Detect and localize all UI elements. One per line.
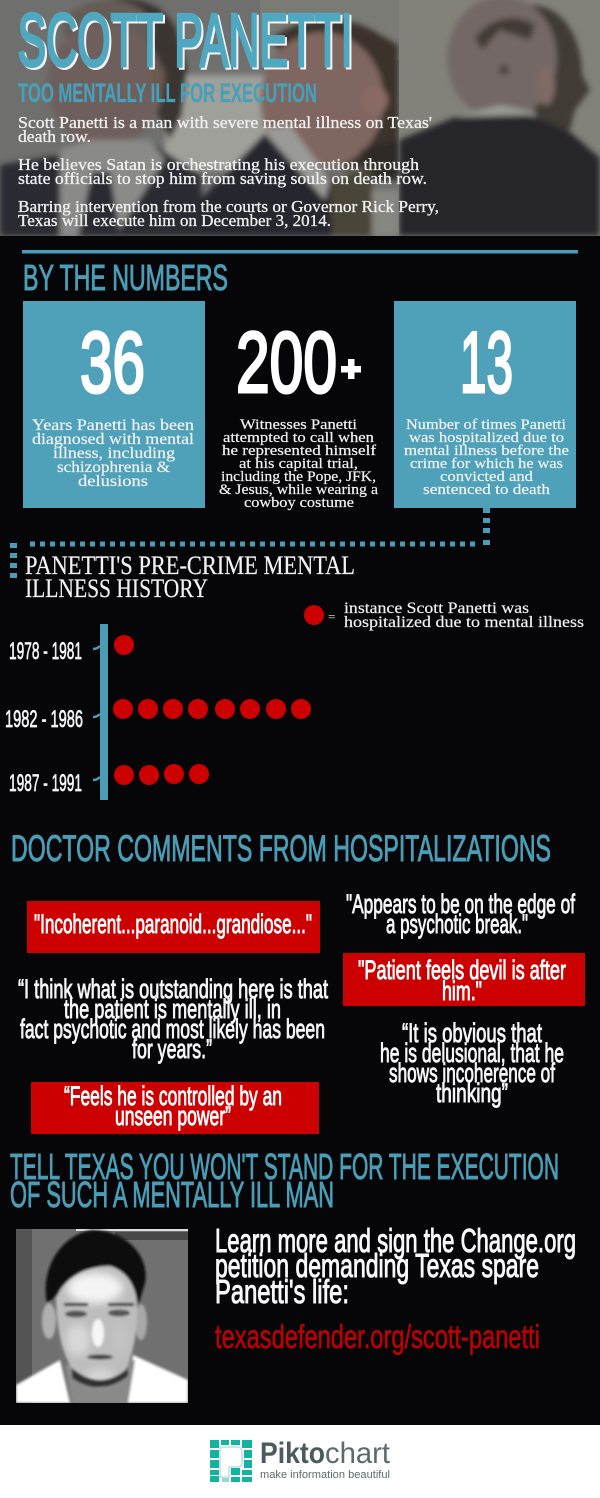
heading: mental illness history: PANETTI'S PRE-CRIME MENTAL [25, 551, 355, 580]
panel: 200+ witnesses: 200 [236, 315, 337, 411]
intro text block: Texas will execute him on December 3, 2014. [18, 211, 331, 230]
heading: tell texas [10, 1146, 559, 1215]
intro text block: death row. [18, 127, 91, 146]
panel: 36 years: diagnosed with mental [32, 431, 195, 448]
panel: 13 hospitalizations: 13 [460, 315, 513, 411]
quote box: unseen power [31, 1081, 319, 1134]
quote box: devil is after him [343, 953, 585, 1006]
panel: 200+ witnesses: cowboy costume [244, 495, 354, 511]
quote box: incoherent [27, 901, 320, 953]
chart: hospitalizations by period [5, 624, 311, 800]
intro text block [18, 113, 439, 230]
photo: Scott Panetti mugshot [16, 1229, 188, 1403]
panel: 13 hospitalizations: mental illness before the [404, 443, 569, 459]
heading: mental illness history [25, 551, 355, 603]
panel: 200+ witnesses: at his capital trial, [239, 456, 358, 472]
panel: 13 hospitalizations: Number of times Panetti [406, 417, 566, 433]
title: Scott Panetti [18, 0, 354, 84]
chart: hospitalizations by period: 1987 - 1991 [9, 770, 82, 797]
call to action text [215, 1222, 576, 1310]
hero photo: mugshot background [0, 0, 600, 236]
heading: by the numbers: BY THE NUMBERS [23, 257, 228, 298]
quote: mentally ill: for years.” [132, 1034, 212, 1064]
logo wordmark: chart [325, 1437, 391, 1470]
quote box: incoherent: "Incoherent...paranoid...grandiose..." [34, 909, 312, 939]
panel: 13 hospitalizations: convicted and [440, 469, 534, 485]
panel: 200+ witnesses [219, 315, 378, 511]
legend: instance Scott Panetti was [344, 600, 529, 617]
panel: 200+ witnesses: & Jesus, while wearing a [219, 482, 378, 498]
panel: 13 hospitalizations [394, 301, 576, 508]
heading: mental illness history: ILLNESS HISTORY [25, 574, 208, 603]
panel: 36 years: illness, including [53, 445, 175, 462]
panel: 36 years: delusions [78, 473, 148, 490]
footer band [0, 1425, 600, 1498]
chart: hospitalizations by period: 1978 - 1981 [9, 638, 82, 665]
dotted connector [10, 508, 490, 578]
call to action text: Panetti's life: [215, 1273, 349, 1310]
quote box: unseen power: unseen power” [115, 1101, 231, 1131]
subtitle: TOO MENTALLY ILL FOR EXECUTION [18, 78, 317, 108]
quote: mentally ill [18, 974, 328, 1064]
quote: mentally ill: the patient is mentally ill, in [64, 994, 281, 1024]
panel: 36 years: Years Panetti has been [32, 417, 194, 434]
panel: 13 hospitalizations: was hospitalized due to [409, 430, 564, 446]
chart: hospitalizations by period: 1982 - 1986 [5, 706, 83, 733]
panel: 36 years [23, 301, 205, 508]
quote: obvious delusional [380, 1018, 564, 1108]
intro text block: He believes Satan is orchestrating his execution through [18, 155, 420, 174]
legend [304, 600, 584, 631]
intro text block: Scott Panetti is a man with severe mental illness on Texas' [18, 113, 432, 132]
quote: obvious delusional: thinking” [436, 1078, 508, 1108]
panel: 13 hospitalizations: sentenced to death [423, 482, 551, 498]
panel: 36 years: schizophrenia & [57, 459, 171, 476]
quote box: devil is after him: him." [442, 976, 482, 1006]
legend: = [328, 609, 335, 624]
panel: 36 years: 36 [80, 315, 145, 411]
logo wordmark [260, 1437, 391, 1481]
title: Scott Panetti: SCOTT PANETTI [18, 0, 352, 82]
panel: 200+ witnesses: Witnesses Panetti [240, 417, 357, 433]
quote box: unseen power: “Feels he is controlled by an [64, 1081, 282, 1111]
intro text block: Barring intervention from the courts or Governor Rick Perry, [18, 197, 439, 216]
icon: piktochart logo [210, 1440, 252, 1482]
panel: 200+ witnesses: attempted to call when [223, 430, 375, 446]
quote: edge of a psychotic break [346, 889, 575, 939]
quote: mentally ill: “I think what is outstanding here is that [18, 974, 328, 1004]
quote: mentally ill: fact psychotic and most likely has been [20, 1014, 325, 1044]
panel: 13 hospitalizations: crime for which he was [410, 456, 563, 472]
panel: 200+ witnesses: he represented himself [222, 443, 376, 459]
quote: obvious delusional: “It is obvious that [402, 1018, 542, 1048]
panel: 200+ witnesses: including the Pope, JFK, [221, 469, 376, 485]
heading: tell texas: OF SUCH A MENTALLY ILL MAN [10, 1174, 334, 1215]
title: Scott Panetti: SCOTT PANETTI [20, 0, 354, 84]
legend: hospitalized due to mental illness [344, 614, 584, 631]
logo wordmark: make information beautiful [260, 1469, 390, 1481]
intro text block: state officials to stop him from saving souls on death row. [18, 169, 427, 188]
logo wordmark: Pikto [260, 1437, 325, 1470]
